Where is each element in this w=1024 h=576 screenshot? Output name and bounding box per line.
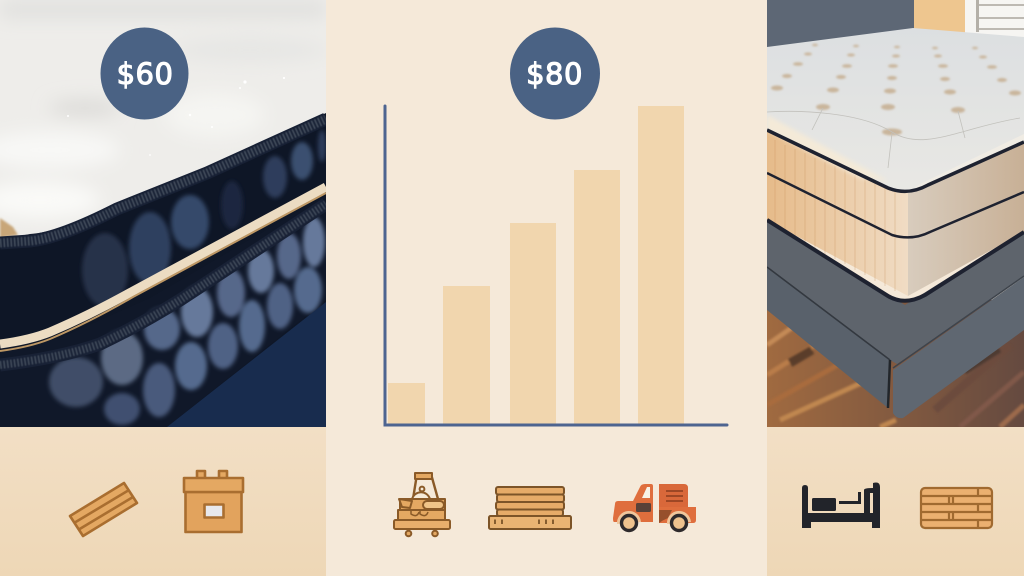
floor	[767, 300, 1024, 427]
upper piping	[0, 119, 326, 243]
lower piping	[0, 204, 326, 365]
cream band	[0, 187, 326, 344]
callout: $60 price badge: $60	[117, 57, 173, 91]
upper mattress side	[767, 130, 908, 238]
lower side band	[46, 216, 326, 427]
bar chart	[385, 106, 727, 425]
panel: left icon strip	[0, 427, 326, 576]
panel: right bed photo	[767, 0, 1024, 427]
piping lines	[767, 130, 1024, 191]
icon: cardboard box	[184, 471, 243, 532]
side pleats	[775, 140, 895, 291]
callout: $80 price badge: $80	[526, 57, 583, 91]
panel: background centre	[326, 0, 767, 576]
floor	[167, 302, 326, 427]
icon: bed frame	[802, 482, 880, 528]
panel: left mattress photo	[0, 0, 330, 427]
mattress top	[767, 28, 1024, 193]
tufted buttons	[771, 44, 1021, 135]
icon: wooden slats panel	[921, 488, 992, 528]
wall and headboard	[767, 0, 915, 50]
chart axes	[385, 106, 727, 425]
icon: stack of planks on pallet	[489, 487, 571, 529]
window	[965, 0, 1024, 38]
mattress top surface	[0, 0, 330, 240]
callout: $60 price badge	[100, 28, 188, 120]
icon: wooden plank	[70, 483, 137, 536]
panel: right icon strip	[767, 427, 1024, 576]
callout: $80 price badge	[510, 28, 600, 120]
quilting seams	[767, 108, 1020, 168]
bars	[388, 106, 684, 424]
bed base	[767, 220, 1024, 418]
upper side band	[80, 113, 326, 306]
icon: forklift	[394, 473, 450, 536]
lower mattress side	[767, 173, 908, 296]
sparkles	[67, 77, 285, 156]
icon: delivery truck	[613, 484, 696, 530]
